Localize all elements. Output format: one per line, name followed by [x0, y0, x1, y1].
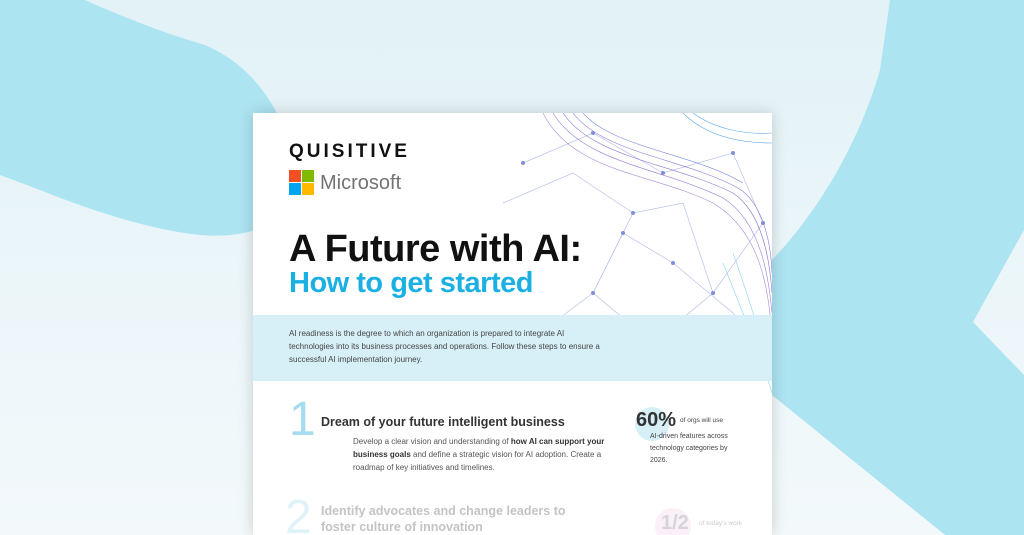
logo: Quisitive: QUISITIVE — [289, 141, 410, 162]
stat 1/2: 1/2 — [661, 512, 689, 534]
stat 60%: of orgs will use — [680, 417, 723, 424]
document page — [253, 113, 772, 535]
step 1 — [289, 393, 604, 472]
stat 1/2 — [655, 508, 742, 535]
network graphic — [503, 113, 772, 394]
intro band — [253, 315, 772, 381]
step 1: Dream of your future intelligent business — [321, 415, 565, 429]
stat 60%: AI-driven features across technology categories by 2026. — [650, 433, 728, 464]
logo: Microsoft — [289, 170, 402, 195]
step 1: 1 — [289, 393, 316, 446]
step 1: Develop a clear vision and understanding of how AI can support your business goals and define a strategic vision for AI adoption. Create a roadmap of key initiatives and timelines. — [353, 437, 604, 472]
subtitle: How to get started — [289, 267, 533, 299]
stat 60% — [635, 407, 728, 464]
step 2 — [285, 491, 566, 535]
stat 60%: 60% — [636, 409, 676, 431]
title: A Future with AI: — [289, 228, 582, 270]
intro band: AI readiness is the degree to which an organization is prepared to integrate AI technologies into its business processes and operations. Follow these steps to ensure a successful AI implementation journey. — [289, 329, 600, 364]
stat 1/2: of today's work — [699, 520, 742, 527]
logo: Microsoft: Microsoft — [320, 172, 401, 194]
step 2: Identify advocates and change leaders to foster culture of innovation — [321, 504, 566, 534]
